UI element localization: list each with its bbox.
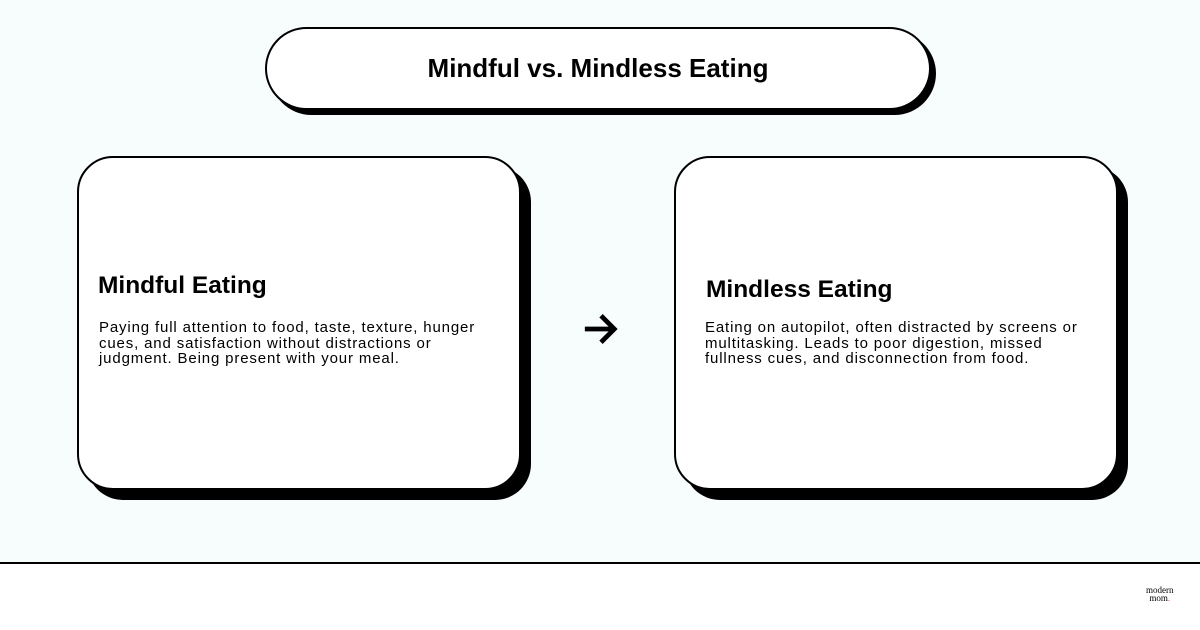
- footer: [0, 562, 1200, 630]
- text: mindless description: multitasking. Leads to poor digestion, missed: [705, 334, 1043, 352]
- title: Mindful vs. Mindless Eating: [428, 53, 768, 83]
- heading: mindless: Mindless Eating: [706, 276, 893, 303]
- text: mindless description: Eating on autopilot, often distracted by screens or: [705, 319, 1078, 336]
- panel: mindless eating: [674, 156, 1118, 490]
- logo: modern: [1146, 585, 1174, 595]
- text: mindful description: [98, 319, 475, 367]
- panel: mindful eating: [77, 156, 521, 490]
- text: mindful description: judgment. Being present with your meal.: [99, 350, 400, 367]
- text: mindful description: Paying full attention to food, taste, texture, hunger: [99, 319, 475, 336]
- text: mindful description: cues, and satisfaction without distractions or: [99, 334, 432, 352]
- title: [265, 27, 931, 110]
- arrow: [584, 314, 618, 344]
- text: mindless description: [705, 319, 1078, 367]
- logo: [1146, 585, 1174, 603]
- logo: mom.: [1149, 593, 1170, 603]
- text: mindless description: fullness cues, and disconnection from food.: [705, 350, 1029, 367]
- heading: mindful: Mindful Eating: [98, 272, 267, 299]
